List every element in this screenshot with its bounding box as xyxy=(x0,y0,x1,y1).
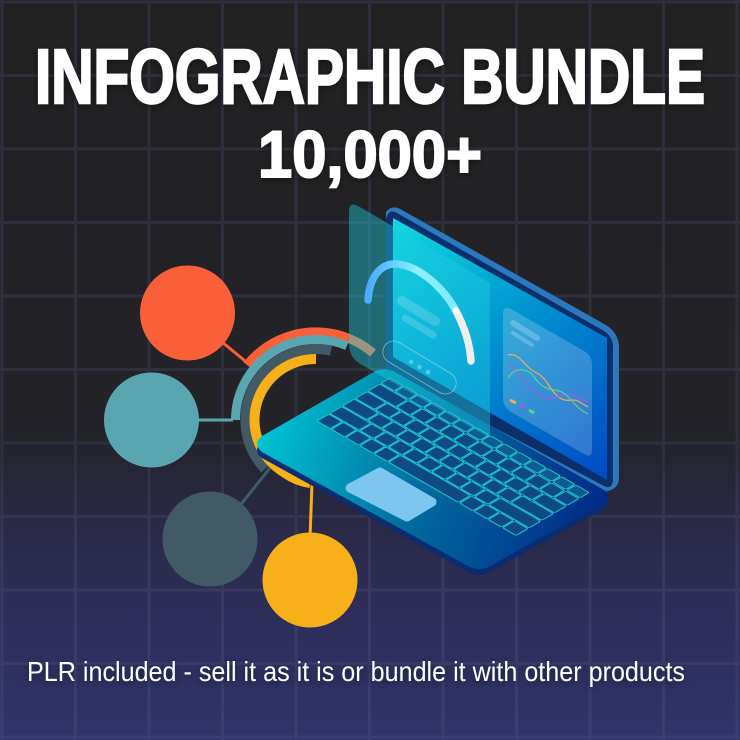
laptop lid xyxy=(386,207,619,500)
pill outline xyxy=(379,337,460,398)
lid edge xyxy=(386,207,619,500)
line chart xyxy=(508,355,588,414)
lid bezel xyxy=(386,212,613,487)
circle: yellow xyxy=(262,532,358,628)
lower grid tint xyxy=(0,470,740,740)
connector: teal xyxy=(195,418,233,422)
subtitle number: 10,000+ xyxy=(258,117,482,191)
chart legend xyxy=(510,400,534,413)
arc: slate xyxy=(245,349,331,469)
laptop deck xyxy=(257,369,608,569)
keyboard xyxy=(317,378,589,536)
gauge marker xyxy=(452,306,460,316)
gauge arc: blue xyxy=(368,264,456,311)
arc: teal xyxy=(236,339,347,420)
radial connectors and circles xyxy=(104,266,358,628)
floating glass panel xyxy=(349,204,490,438)
footer caption: PLR included - sell it as it is or bundle it with other products xyxy=(27,656,685,687)
connector: orange xyxy=(222,342,250,365)
circle: teal xyxy=(104,372,199,468)
glass pane xyxy=(349,204,490,438)
ring arcs xyxy=(236,332,349,484)
trackpad xyxy=(350,472,432,517)
laptop xyxy=(257,207,619,575)
gauge arc: white xyxy=(456,311,471,361)
laptop base edge xyxy=(257,375,608,575)
screen card xyxy=(503,308,592,456)
arc: yellow lower xyxy=(262,450,310,484)
arc: orange xyxy=(247,332,349,365)
arc: yellow xyxy=(254,359,316,479)
connector: yellow xyxy=(310,483,312,538)
connector: slate xyxy=(238,468,270,508)
circle: orange xyxy=(140,266,235,360)
panel text bars xyxy=(402,301,435,335)
arc: tan over glass xyxy=(349,338,373,353)
circle: slate xyxy=(162,492,258,586)
pill dots xyxy=(409,360,430,374)
card heading bars xyxy=(513,323,537,345)
screen xyxy=(393,218,607,480)
